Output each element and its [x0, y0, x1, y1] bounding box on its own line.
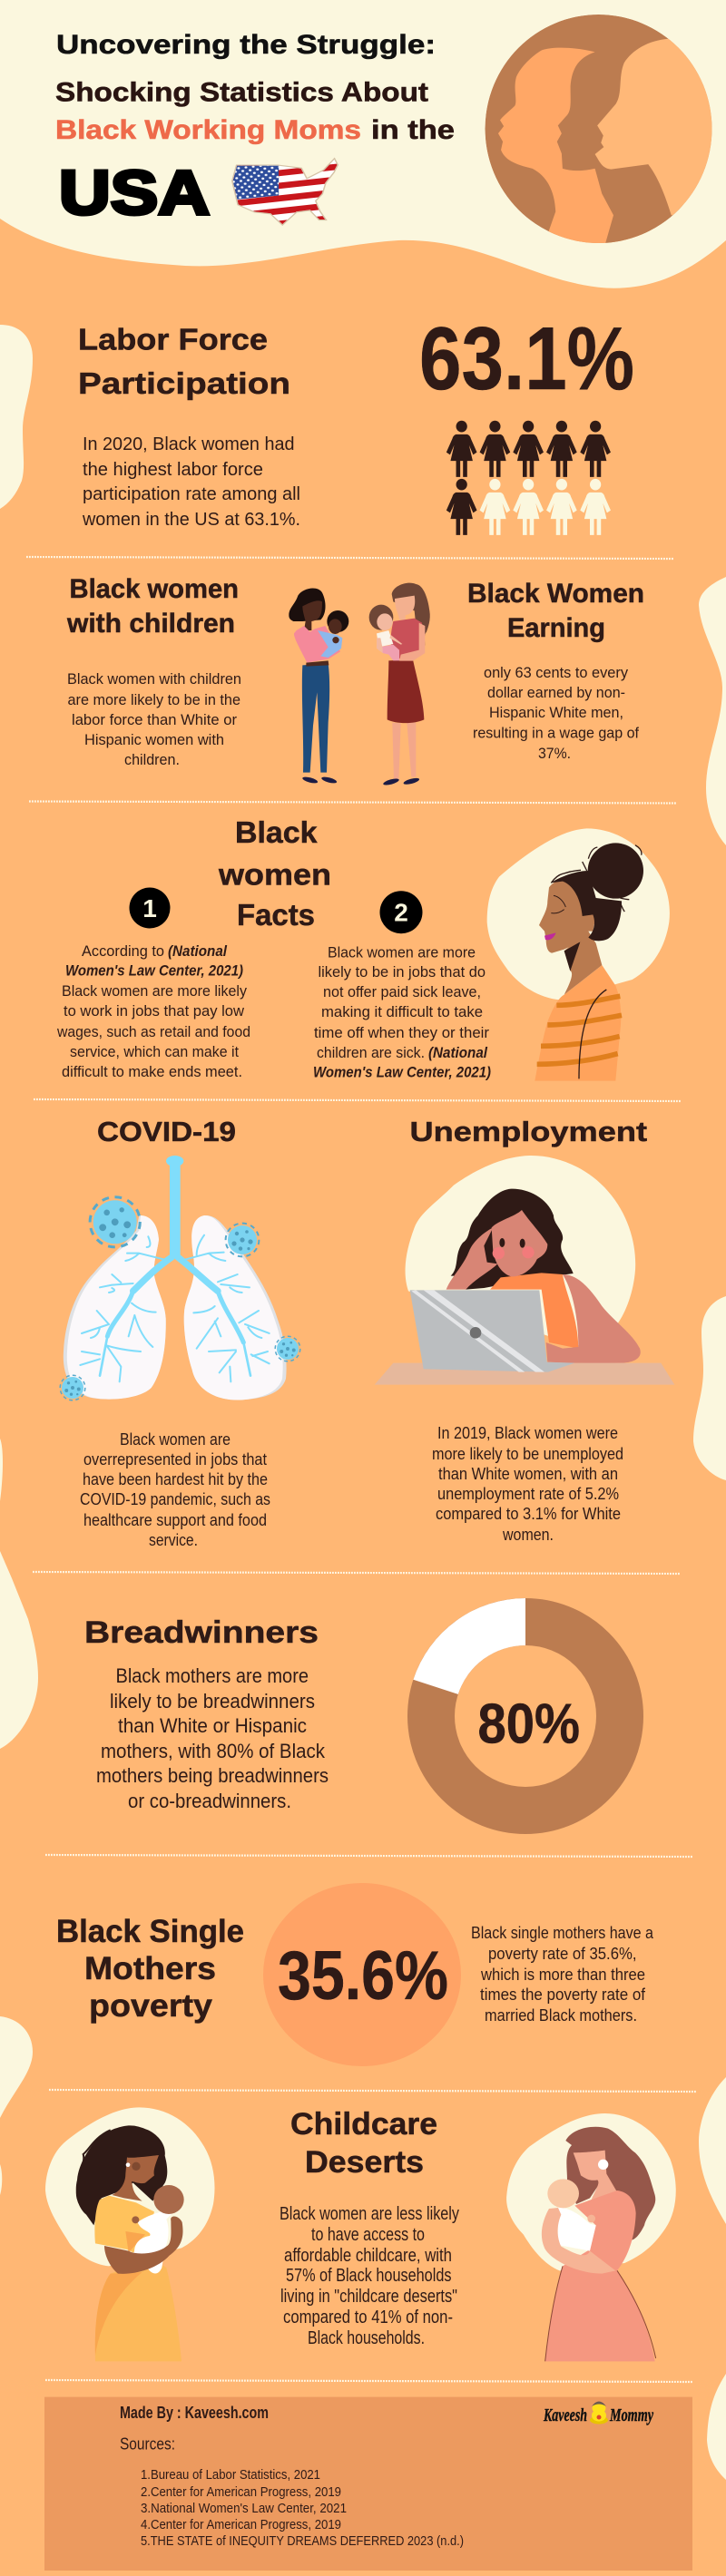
pictogram: ten women, six dark — [446, 421, 611, 535]
sources list: 5.THE STATE of INEQUITY DREAMS DEFERRED 2023 (n.d.) — [141, 2533, 464, 2549]
stat circle: 35.6%: 35.6% — [278, 1937, 448, 2015]
sources list: 2.Center for American Progress, 2019 — [141, 2484, 341, 2500]
text block: with children description — [67, 670, 241, 768]
text block: covid description: healthcare support and food — [83, 1511, 267, 1529]
donut chart: 80% — [413, 1598, 620, 1810]
heading: with children — [66, 574, 239, 639]
text block: earning description — [473, 664, 639, 762]
text block: with children description: labor force than White or — [72, 711, 237, 728]
text block: earning description: dollar earned by non- — [487, 684, 625, 701]
text block: covid description: service. — [149, 1531, 198, 1549]
sources list: 4.Center for American Progress, 2019 — [141, 2517, 341, 2532]
illustration: stressed woman at laptop — [375, 1156, 674, 1385]
heading: single mothers — [56, 1914, 244, 2024]
text block: childcare description: 57% of Black households — [286, 2266, 452, 2286]
text block: poverty description: Black single mothers have a — [471, 1924, 654, 1942]
badge: 1: 1 — [142, 894, 157, 922]
text block: unemployment description: than White women, with an — [438, 1465, 618, 1483]
text block: breadwinners description: than White or Hispanic — [118, 1714, 307, 1737]
illustration: mother in yellow dress with baby — [45, 2107, 215, 2361]
illustration: mother in coral dress with baby — [506, 2113, 676, 2361]
illustration: two mothers holding children — [289, 583, 430, 786]
text block: with children description: Black women with children — [67, 670, 241, 688]
text block: fact 1: wages, such as retail and food — [56, 1023, 250, 1040]
logo: Kaveesh Mommy — [543, 2402, 653, 2425]
text block: poverty description: which is more than three — [480, 1966, 645, 1984]
heading: labor force — [78, 323, 290, 400]
text block: fact 1 — [56, 942, 250, 1080]
text block: fact 2: Women's Law Center, 2021) — [313, 1064, 491, 1081]
text block: labor force description: the highest labor force — [83, 460, 263, 480]
text block: earning description: Hispanic White men, — [489, 704, 623, 721]
text block: covid description: COVID-19 pandemic, such as — [80, 1490, 270, 1508]
panel: black women earning — [467, 579, 644, 762]
panel: black single mothers poverty — [56, 1883, 654, 2066]
icon: USA flag map — [231, 158, 338, 226]
text block: fact 1: service, which can make it — [70, 1043, 239, 1060]
text block: labor force description: women in the US at 63.1%. — [82, 510, 300, 530]
text block: poverty description — [471, 1924, 654, 2025]
badge: 1 — [129, 887, 171, 929]
heading: with children: with children — [66, 609, 235, 639]
text block: fact 1: (National — [168, 942, 228, 960]
text block: unemployment description: In 2019, Black women were — [437, 1424, 618, 1442]
heading: with children: Black women — [69, 574, 239, 604]
text block: poverty description: married Black mothers. — [485, 2006, 637, 2025]
heading: single mothers: poverty — [89, 1988, 213, 2024]
text block: breadwinners description — [96, 1664, 329, 1812]
icon: three women silhouettes — [485, 15, 726, 248]
text block: fact 1: difficult to make ends meet. — [62, 1063, 242, 1080]
heading: labor force: Participation — [78, 366, 290, 400]
text block: fact 2: not offer paid sick leave, — [323, 983, 481, 1000]
text block: breadwinners description: mothers, with 80% of Black — [101, 1740, 326, 1762]
text block: childcare description: to have access to — [311, 2225, 425, 2245]
heading: labor force: Labor Force — [78, 323, 268, 356]
text block: childcare description: compared to 41% of non- — [283, 2308, 453, 2327]
text block: unemployment description: unemployment rate of 5.2% — [437, 1485, 619, 1503]
dotted dividers — [26, 557, 674, 559]
right mother — [369, 583, 430, 786]
heading: facts — [218, 815, 331, 932]
text block: fact 1: According to — [82, 942, 164, 960]
heading: earning — [467, 579, 644, 643]
text block: covid description — [80, 1430, 270, 1549]
text block: labor force description: participation rate among all — [83, 484, 300, 504]
text block: poverty description: times the poverty rate of — [480, 1986, 646, 2004]
text block: fact 1: Black women are more likely — [62, 982, 247, 1000]
heading: childcare deserts — [290, 2107, 437, 2180]
text block: with children description: are more likely to be in the — [67, 691, 240, 708]
illustration: woman in profile with hair bun — [487, 828, 670, 1081]
sources heading: Sources: — [120, 2435, 175, 2453]
text block: unemployment description: compared to 3.1% for White — [436, 1505, 621, 1523]
left mother — [289, 589, 348, 785]
heading: facts: women — [218, 858, 331, 892]
text block: fact 2: children are sick. — [317, 1044, 425, 1061]
text block: earning description: only 63 cents to every — [484, 664, 628, 681]
stat: 63.1%: 63.1% — [419, 308, 634, 408]
text block: fact 1: to work in jobs that pay low — [64, 1002, 245, 1020]
heading: childcare deserts: Deserts — [305, 2145, 424, 2180]
panel: black women facts — [56, 815, 491, 1081]
heading: single mothers: Mothers — [84, 1951, 216, 1986]
text block: unemployment description — [432, 1424, 623, 1544]
title: Uncovering the Struggle: — [56, 30, 436, 60]
sources list: 3.National Women's Law Center, 2021 — [141, 2501, 347, 2516]
text block: breadwinners description: or co-breadwinners. — [128, 1790, 291, 1812]
text block: covid description: have been hardest hit by the — [83, 1470, 268, 1488]
sources list — [141, 2467, 464, 2549]
text block: breadwinners description: likely to be breadwinners — [110, 1690, 315, 1712]
heading: earning: Earning — [507, 613, 605, 643]
illustration: lungs with virus — [60, 1156, 300, 1400]
text block: labor force description — [82, 434, 300, 530]
heading: facts: Facts — [237, 898, 315, 932]
title: in the — [371, 115, 455, 145]
heading: unemployment: Unemployment — [410, 1116, 647, 1147]
heading: childcare deserts: Childcare — [290, 2107, 437, 2142]
text block: fact 1: Women's Law Center, 2021) — [65, 962, 243, 980]
stat circle: 35.6% — [263, 1883, 461, 2066]
credit: Made By : Kaveesh.com — [120, 2404, 269, 2422]
donut chart: 80%: 80% — [477, 1693, 580, 1756]
text block: childcare description: Black households. — [308, 2328, 425, 2348]
title: USA — [59, 158, 210, 228]
heading: facts: Black — [235, 815, 318, 849]
text block: labor force description: In 2020, Black women had — [83, 434, 294, 454]
text block: fact 2: making it difficult to take — [321, 1003, 483, 1020]
text block: childcare description: living in "childcare deserts" — [280, 2287, 457, 2307]
heading: single mothers: Black Single — [56, 1914, 244, 1949]
title: Black Working Moms — [55, 115, 361, 145]
heading: earning: Black Women — [467, 579, 644, 609]
logo: Kaveesh Mommy: Mommy — [609, 2405, 653, 2425]
panel: footer sources — [44, 2397, 692, 2571]
text block: unemployment description: more likely to be unemployed — [432, 1445, 623, 1463]
panel: childcare deserts — [280, 2107, 459, 2348]
panel: labor force participation — [78, 308, 634, 535]
heading: breadwinners: Breadwinners — [84, 1615, 319, 1650]
text block: fact 2: (National — [428, 1044, 488, 1061]
text block: breadwinners description: mothers being breadwinners — [96, 1764, 329, 1787]
panel: black women with children — [66, 574, 241, 768]
text block: with children description: Hispanic women with — [84, 731, 224, 748]
text block: fact 2: likely to be in jobs that do — [318, 963, 486, 981]
text block: covid description: Black women are — [120, 1430, 231, 1449]
text block: with children description: children. — [124, 751, 180, 768]
title: Shocking Statistics About — [55, 78, 428, 107]
text block: poverty description: poverty rate of 35.6%, — [488, 1945, 637, 1963]
badge: 2 — [379, 891, 423, 933]
text block: earning description: 37%. — [538, 745, 571, 762]
text block: fact 2 — [313, 943, 491, 1081]
header cream wave — [0, 0, 726, 288]
text block: fact 2: Black women are more — [328, 943, 476, 961]
text block: childcare description — [280, 2204, 459, 2348]
badge: 2: 2 — [394, 898, 408, 927]
text block: childcare description: Black women are less likely — [280, 2204, 459, 2224]
text block: fact 2: time off when they or their — [314, 1024, 489, 1041]
panel: covid-19 — [60, 1116, 300, 1549]
text block: breadwinners description: Black mothers are more — [116, 1664, 309, 1687]
text block: covid description: overrepresented in jobs that — [83, 1450, 267, 1469]
title — [55, 30, 455, 228]
text block: unemployment description: women. — [502, 1526, 554, 1544]
panel: unemployment — [375, 1116, 674, 1544]
text block: earning description: resulting in a wage gap of — [473, 724, 639, 742]
panel: breadwinners — [84, 1598, 620, 1812]
sources list: 1.Bureau of Labor Statistics, 2021 — [141, 2467, 320, 2483]
logo: Kaveesh Mommy: Kaveesh — [543, 2405, 587, 2425]
text block: childcare description: affordable childcare, with — [284, 2246, 452, 2266]
heading: covid-19: COVID-19 — [97, 1116, 236, 1147]
